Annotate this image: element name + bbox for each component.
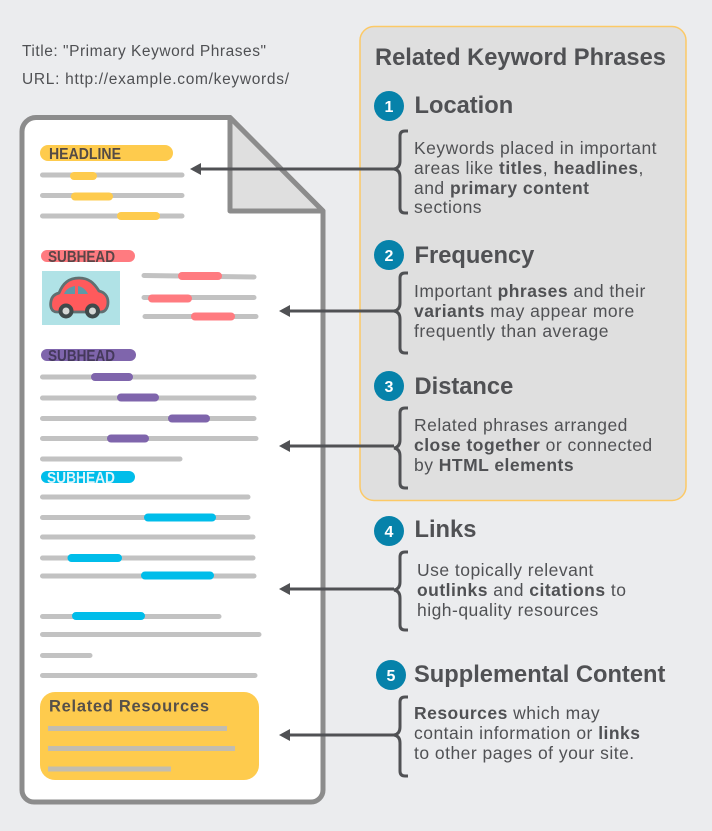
page title and URL: URL: http://example.com/keywords/ xyxy=(22,71,290,88)
subhead section: purple: SUBHEAD xyxy=(48,348,115,365)
document illustration xyxy=(22,118,323,802)
description: contain information or links xyxy=(414,723,640,743)
description: Resources which may xyxy=(414,703,600,723)
subhead section: purple xyxy=(41,348,256,459)
page fold xyxy=(230,118,323,211)
heading: Supplemental Content xyxy=(414,662,665,688)
description: by HTML elements xyxy=(414,455,574,475)
subhead section: red: SUBHEAD xyxy=(48,249,115,266)
number badge 4: 4 xyxy=(385,524,394,541)
section 2: frequency xyxy=(279,240,646,353)
subhead section: red xyxy=(41,249,256,325)
description: high-quality resources xyxy=(417,600,599,620)
panel: related keyword phrases xyxy=(360,26,686,500)
heading: Distance xyxy=(414,374,513,400)
description: Use topically relevant xyxy=(417,560,594,580)
section 1: location xyxy=(190,91,657,217)
bracket and arrow xyxy=(190,131,408,213)
image: car xyxy=(42,271,120,325)
bracket and arrow xyxy=(279,273,408,353)
description: variants may appear more xyxy=(414,301,635,321)
heading: Frequency xyxy=(414,243,535,269)
description: sections xyxy=(414,197,482,217)
description: areas like titles, headlines, xyxy=(414,158,644,178)
panel heading: Related Keyword Phrases xyxy=(375,45,666,71)
description: Related phrases arranged xyxy=(414,415,628,435)
description: to other pages of your site. xyxy=(414,743,635,763)
section 4: links xyxy=(279,516,626,630)
page title and URL xyxy=(22,43,290,88)
bracket and arrow xyxy=(279,697,408,776)
description: close together or connected xyxy=(414,435,653,455)
number badge 1 xyxy=(374,91,404,121)
heading: Location xyxy=(414,93,513,119)
number badge 2 xyxy=(374,240,404,270)
description: Important phrases and their xyxy=(414,281,646,301)
number badge 3 xyxy=(374,371,404,401)
number badge 5: 5 xyxy=(387,668,396,685)
description: frequently than average xyxy=(414,321,609,341)
number badge 5 xyxy=(376,660,406,690)
section 3: distance xyxy=(279,371,653,488)
description: outlinks and citations to xyxy=(417,580,626,600)
headline section xyxy=(40,145,182,216)
related resources box xyxy=(40,692,259,780)
subhead section: blue: SUBHEAD xyxy=(47,470,115,487)
bracket and arrow xyxy=(279,408,408,488)
number badge 4 xyxy=(374,516,404,546)
section 5: supplemental content xyxy=(279,660,665,776)
related resources box: Related Resources xyxy=(49,698,209,716)
subhead section: blue xyxy=(41,470,259,676)
heading: Links xyxy=(414,517,476,543)
description: Keywords placed in important xyxy=(414,138,657,158)
number badge 2: 2 xyxy=(385,248,394,265)
document page xyxy=(22,118,323,802)
description: and primary content xyxy=(414,178,589,198)
headline section: HEADLINE xyxy=(49,146,121,163)
bracket and arrow xyxy=(279,552,408,630)
number badge 3: 3 xyxy=(385,379,394,396)
number badge 1: 1 xyxy=(385,99,394,116)
page title and URL: Title: "Primary Keyword Phrases" xyxy=(22,43,266,60)
